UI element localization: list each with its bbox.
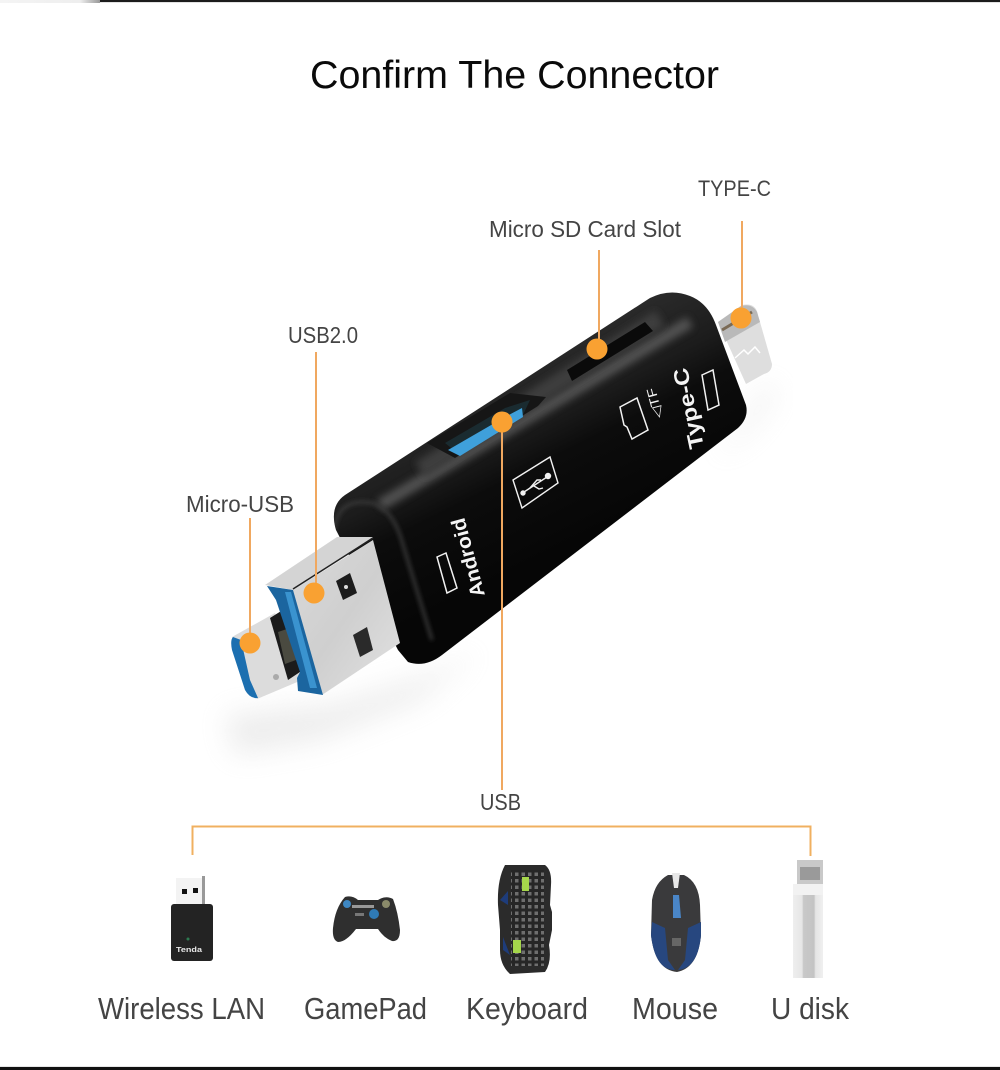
label: TF: ◁TF (643, 386, 666, 420)
icon: usb symbol (513, 457, 558, 508)
top border rule (0, 0, 1000, 3)
icon: type-c port (702, 370, 719, 410)
icon: micro sd card (620, 398, 648, 439)
device: gamepad (333, 896, 400, 942)
callout: TYPE-C: TYPE-C (698, 176, 771, 201)
icon: micro-usb port (437, 553, 457, 593)
label: U disk: U disk (771, 991, 849, 1026)
callout: Micro-USB: Micro-USB (186, 491, 294, 517)
type-c plug (718, 304, 772, 384)
device: mouse (651, 873, 701, 972)
callout: Micro SD Card Slot (489, 216, 682, 360)
body highlights (334, 318, 690, 640)
callout: Micro-USB (186, 491, 294, 654)
black body (334, 292, 747, 664)
soft shadow under device (225, 380, 775, 755)
label: Wireless LAN: Wireless LAN (98, 991, 265, 1026)
callout: USB (480, 412, 521, 815)
micro-usb plug (231, 608, 306, 699)
callout: USB: USB (480, 789, 521, 815)
usb port (427, 393, 546, 458)
label: Keyboard: Keyboard (466, 991, 588, 1026)
bracket connector (192, 826, 810, 856)
device: wireless LAN adapter: Tenda (176, 945, 203, 954)
card reader product image (225, 292, 775, 755)
bottom border rule (0, 1066, 1000, 1070)
label: Mouse: Mouse (632, 991, 718, 1026)
usb plug (265, 537, 400, 695)
callout: Micro SD Card Slot: Micro SD Card Slot (489, 216, 682, 242)
callout: USB2.0 (288, 322, 358, 604)
micro sd slot (567, 322, 653, 381)
device: wireless LAN adapter (171, 876, 213, 961)
device: U disk (793, 860, 823, 978)
device labels (98, 991, 849, 1026)
label: Android: Android (448, 515, 490, 599)
label: GamePad: GamePad (304, 991, 427, 1026)
label: Type-C: Type-C (669, 366, 709, 451)
callout: TYPE-C (698, 176, 771, 328)
callout: USB2.0: USB2.0 (288, 322, 358, 348)
device: keyboard (498, 865, 552, 974)
title: Confirm The Connector (310, 54, 719, 97)
